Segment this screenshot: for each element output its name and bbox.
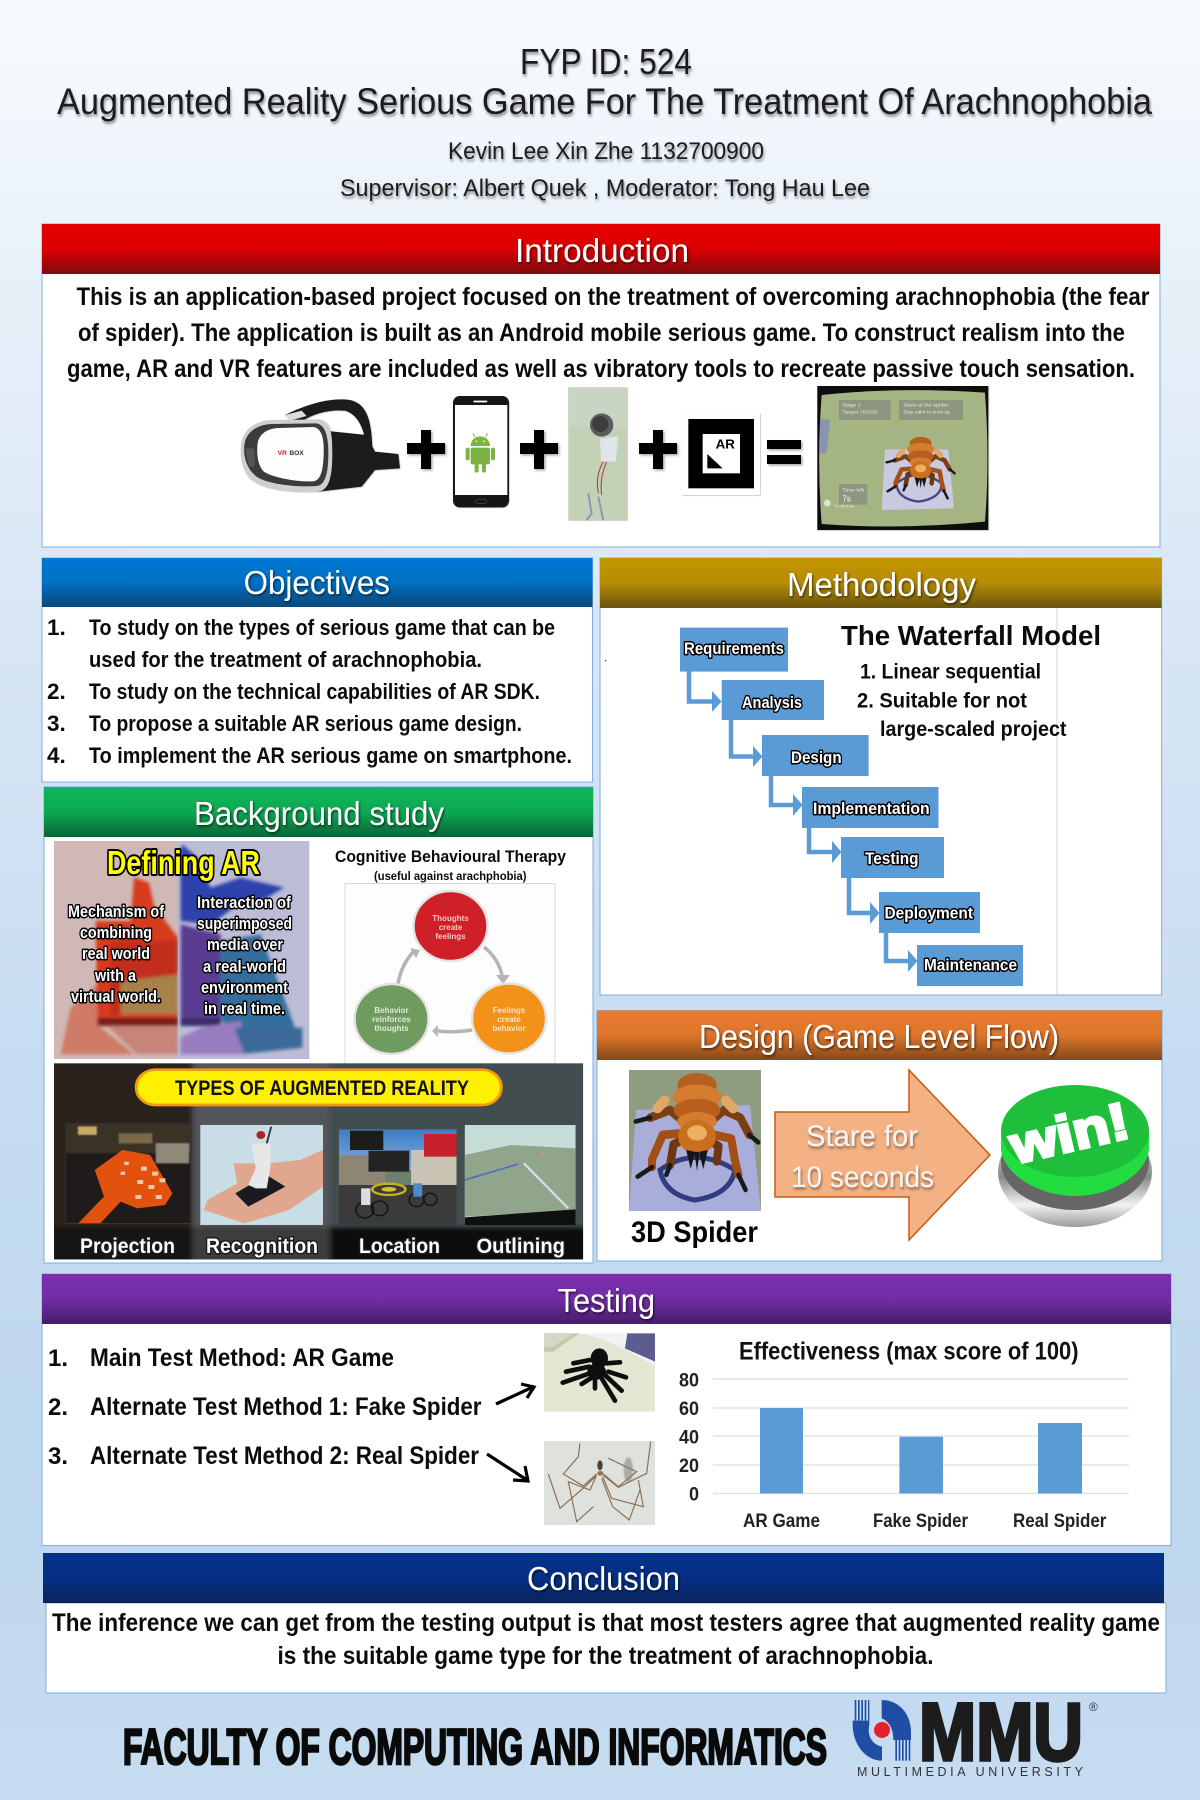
panel: conclusion: [43, 1553, 1166, 1693]
heading: conclusion: Conclusion: [527, 1560, 680, 1597]
panel: design game level flow: [597, 1010, 1162, 1261]
heading: testing: Testing: [558, 1282, 655, 1319]
panel: methodology: [600, 558, 1162, 995]
objectives list: 4.: [47, 743, 66, 768]
test methods list: Alternate Test Method 2: Real Spider: [90, 1442, 479, 1470]
heading: cognitive behavioural therapy: (useful against arachphobia): [374, 869, 527, 883]
conclusion text: is the suitable game type for the treatment of arachnophobia.: [278, 1642, 934, 1670]
image: defining AR: in real time.: [204, 999, 285, 1018]
icon: plus: [639, 430, 677, 469]
image: defining AR: real world: [82, 944, 150, 963]
icon: plus: [520, 430, 558, 469]
diagram: CBT cycle: reinforces: [372, 1015, 411, 1024]
icon: AR marker: AR: [716, 436, 735, 451]
waterfall diagram: Deployment: [884, 904, 973, 923]
title pill: [136, 1070, 501, 1105]
icon: android phone: [453, 396, 509, 507]
panel: background study: [44, 787, 593, 1267]
photo: projection: [66, 1123, 191, 1223]
title block: Supervisor: Albert Quek , Moderator: Tong Hau Lee: [340, 175, 870, 202]
photo: AR game screenshot: Stay calm to level up: [903, 409, 950, 415]
objectives list: 2.: [47, 679, 66, 704]
photo: outlining: [465, 1125, 576, 1225]
waterfall model description: 1. Linear sequential: [860, 660, 1041, 684]
image: defining AR: [54, 841, 309, 1059]
objectives list: To propose a suitable AR serious game design.: [89, 711, 522, 736]
heading: design: Design (Game Level Flow): [699, 1018, 1059, 1055]
arrow: stare for 10 seconds: Stare for: [806, 1120, 918, 1153]
chart: effectiveness: Effectiveness (max score of 100): [739, 1338, 1078, 1366]
image: defining AR: Defining AR: [107, 844, 260, 881]
logo: MMU: MMU: [919, 1687, 1083, 1778]
heading: introduction: Introduction: [515, 232, 689, 269]
diagram: CBT cycle: Behavior: [374, 1006, 409, 1015]
chart: effectiveness: 0: [689, 1484, 699, 1506]
icon: VR headset: BOX: [289, 450, 304, 457]
photo: AR game screenshot: Stage 1: [842, 403, 861, 409]
image: defining AR: virtual world.: [71, 987, 161, 1006]
logo: MMU: MULTIMEDIA UNIVERSITY: [857, 1765, 1084, 1779]
title block: Kevin Lee Xin Zhe 1132700900: [448, 138, 764, 165]
photo: recognition: [200, 1125, 323, 1225]
chart: effectiveness: [679, 1338, 1129, 1532]
objectives list: 3.: [47, 711, 66, 736]
image: 3D spider: [629, 1070, 761, 1211]
photo: location: [339, 1129, 457, 1225]
image: defining AR: Mechanism of: [68, 902, 164, 921]
diagram: CBT cycle: behavior: [492, 1024, 526, 1033]
objectives list: To implement the AR serious game on smartphone.: [89, 743, 572, 768]
objectives list: [47, 615, 572, 768]
image: types of augmented reality: Outlining: [476, 1235, 565, 1258]
waterfall model description: 2. Suitable for not: [857, 690, 1027, 712]
footer: faculty name: FACULTY OF COMPUTING AND INFORMATICS: [123, 1719, 827, 1775]
introduction text: [67, 283, 1150, 383]
test methods list: Main Test Method: AR Game: [90, 1344, 394, 1372]
title block: FYP ID: 524: [520, 41, 692, 82]
diagram: CBT cycle: create: [497, 1015, 521, 1024]
heading: cognitive behavioural therapy: [335, 847, 566, 883]
photo: AR game screenshot: 7s: [842, 494, 851, 503]
waterfall model description: The Waterfall Model: [841, 620, 1101, 651]
test methods list: Alternate Test Method 1: Fake Spider: [90, 1393, 482, 1421]
waterfall diagram: Analysis: [742, 693, 802, 712]
icon: win button: win!: [1004, 1092, 1135, 1176]
photo: fake spider: [544, 1333, 655, 1412]
arrow: stare for 10 seconds: 10 seconds: [791, 1161, 934, 1194]
objectives list: used for the treatment of arachnophobia.: [89, 647, 482, 672]
photo: AR game screenshot: [817, 386, 988, 530]
photo: real spider: [544, 1441, 655, 1525]
test methods list: 3.: [48, 1443, 68, 1470]
image: defining AR: media over: [207, 935, 283, 954]
waterfall model description: large-scaled project: [880, 718, 1066, 741]
image: defining AR: environment: [201, 978, 288, 997]
icon: plus: [407, 430, 445, 469]
waterfall diagram: Maintenance: [924, 956, 1017, 974]
image: types of augmented reality: [45, 1057, 592, 1267]
waterfall model description: [841, 620, 1101, 741]
photo: AR game screenshot: Vuforia: [834, 503, 854, 509]
heading: objectives: Objectives: [244, 564, 390, 601]
photo: AR game screenshot: Stare at the spider: [903, 403, 949, 409]
chart: effectiveness: 60: [679, 1399, 699, 1420]
icon: VR headset: [241, 399, 400, 492]
photo: AR game screenshot: Time left: [842, 488, 865, 494]
image: types of augmented reality: Location: [359, 1235, 440, 1258]
test methods list: [48, 1344, 482, 1470]
objectives list: To study on the types of serious game that can be: [89, 615, 555, 640]
image: types of augmented reality: Projection: [80, 1235, 175, 1258]
image: types of augmented reality: Recognition: [206, 1235, 318, 1258]
objectives list: 1.: [47, 615, 66, 640]
diagram: CBT cycle: [345, 884, 555, 1064]
waterfall diagram: Testing: [865, 849, 918, 868]
title block: [57, 41, 1152, 202]
chart: effectiveness: 80: [679, 1370, 699, 1392]
image: types of augmented reality: TYPES OF AUGMENTED REALITY: [175, 1077, 469, 1100]
heading: cognitive behavioural therapy: Cognitive Behavioural Therapy: [335, 847, 566, 866]
chart: effectiveness: Real Spider: [1013, 1511, 1107, 1532]
diagram: CBT cycle: create: [439, 923, 463, 932]
icon: win button: [998, 1085, 1152, 1227]
waterfall diagram: Design: [791, 748, 842, 767]
image: defining AR: a real-world: [203, 957, 286, 976]
logo: MMU: [853, 1687, 1098, 1779]
panel: introduction: [42, 224, 1160, 547]
chart: effectiveness: 40: [679, 1428, 699, 1448]
objectives list: To study on the technical capabilities of AR SDK.: [89, 679, 540, 704]
panel: objectives: [42, 558, 592, 782]
arrow: to real spider: [487, 1454, 528, 1481]
diagram: CBT cycle: feelings: [435, 932, 466, 941]
diagram: CBT cycle: Feelings: [493, 1006, 526, 1015]
panel: testing: [42, 1274, 1171, 1546]
chart: effectiveness: 20: [679, 1456, 699, 1477]
icon: VR headset: VR: [278, 450, 287, 457]
conclusion text: [52, 1609, 1160, 1670]
heading: background study: Background study: [194, 795, 444, 832]
image: defining AR: Interaction of: [197, 893, 291, 912]
diagram: CBT cycle: thoughts: [374, 1024, 409, 1033]
chart: effectiveness: Fake Spider: [873, 1511, 969, 1532]
waterfall diagram: Requirements: [684, 639, 784, 658]
image: defining AR: with a: [94, 966, 136, 985]
photo: vibration motor: [568, 387, 627, 520]
icon: equals: [767, 440, 801, 464]
label: 3D spider: 3D Spider: [631, 1216, 758, 1249]
arrow: to fake spider: [496, 1384, 534, 1404]
photo: AR game screenshot: Target 70/100: [842, 409, 878, 415]
diagram: CBT cycle: Thoughts: [432, 914, 469, 923]
test methods list: 1.: [48, 1345, 68, 1372]
heading: methodology: Methodology: [787, 566, 976, 603]
logo: MMU: ®: [1089, 1700, 1098, 1714]
image: defining AR: superimposed: [197, 914, 292, 933]
chart: effectiveness: AR Game: [743, 1511, 820, 1532]
icon: AR marker: [682, 413, 760, 495]
test methods list: 2.: [48, 1394, 68, 1421]
image: defining AR: combining: [80, 923, 152, 942]
waterfall diagram: Implementation: [813, 799, 930, 818]
arrow: stare for 10 seconds: [775, 1070, 990, 1240]
waterfall diagram: [680, 628, 1023, 986]
